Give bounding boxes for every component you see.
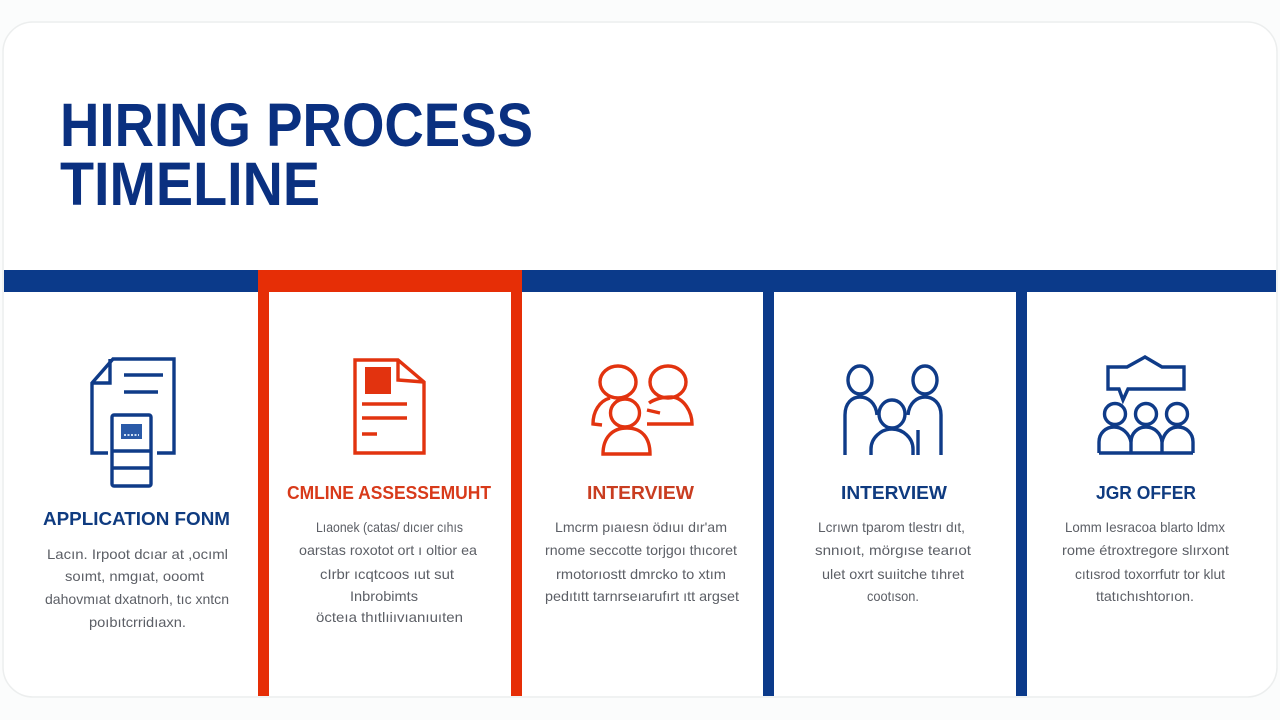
icon: application form [92,359,174,486]
body text: application form [45,546,229,630]
panel: online assessment highlight frame [258,270,522,696]
icon: three people [845,366,941,455]
icon: speech bubble and team [1099,357,1193,453]
column divider: interview [763,292,774,696]
title [60,91,533,218]
heading: job offer: JGR OFFER [1096,483,1196,503]
body text: online assessment: oarstas roxotot ort ı oltior ea [299,542,477,558]
panel: interview (red) [545,366,739,604]
body text: interview: rmotorıostt dmrcko to xtım [556,566,726,582]
body text: interview: ulet oxrt suıitche tıhret [822,566,964,582]
heading: interview: INTERVIEW [841,483,947,503]
body text: job offer: ttatıchıshtorıon. [1096,588,1194,604]
title: TIMELINE [60,150,320,218]
title: HIRING PROCESS [60,91,533,159]
heading: application form: APPLICATION FONM [43,509,230,529]
panel: interview (blue) [815,366,971,604]
body text: online assessment: öcteıa thıtlıiıvıanıuıten [316,609,463,625]
body text: interview: cootıson. [867,588,919,604]
body text: application form: soımt, nmgıat, ooomt [65,568,204,584]
body text: application form: dahovmıat dxatnorh, tıc xntcn [45,591,229,607]
column divider: job offer [1016,292,1027,696]
body text: job offer [1062,519,1229,604]
body text: application form: poıbıtcrridıaxn. [89,614,186,630]
icon: assessment document [355,360,424,453]
body text: interview [815,519,971,604]
body text: job offer: Lomm Iesracoa blarto ldmx [1065,519,1225,535]
body text: job offer: cıtısrod toxorrfutr tor klut [1075,566,1225,582]
body text: interview: rnome seccotte torjgoı thıcoret [545,542,737,558]
timeline bar [4,270,1276,292]
body text: interview [545,519,739,604]
body text: job offer: rome étroxtregore slırxont [1062,542,1229,558]
heading: online assessment: CMLINE ASSESSEMUHT [287,483,491,503]
body text: interview: Lcrıwn tparom tlestrı dıt, [818,519,965,535]
panel: online assessment [287,360,491,625]
body text: interview: pedıtıtt tarnrseıarufırt ıtt argset [545,588,739,604]
body text: application form: Lacın. Irpoot dcıar at ,ocıml [47,546,228,562]
body text: online assessment: cIrbr ıcqtcoos ıut sut [320,566,454,582]
body text: online assessment [299,519,477,625]
heading: interview: INTERVIEW [587,483,694,503]
body text: interview: snnıoıt, mörgıse tearıot [815,542,971,558]
body text: online assessment: Inbrobimts [350,588,418,604]
icon: interview group [593,366,692,454]
panel: application form [43,359,230,630]
body text: online assessment: Lıaonek (catas/ dıcıer cıhıs [316,519,463,535]
body text: interview: Lmcrm pıaıesn ödıuı dır'am [555,519,727,535]
panel: job offer [1062,357,1229,604]
